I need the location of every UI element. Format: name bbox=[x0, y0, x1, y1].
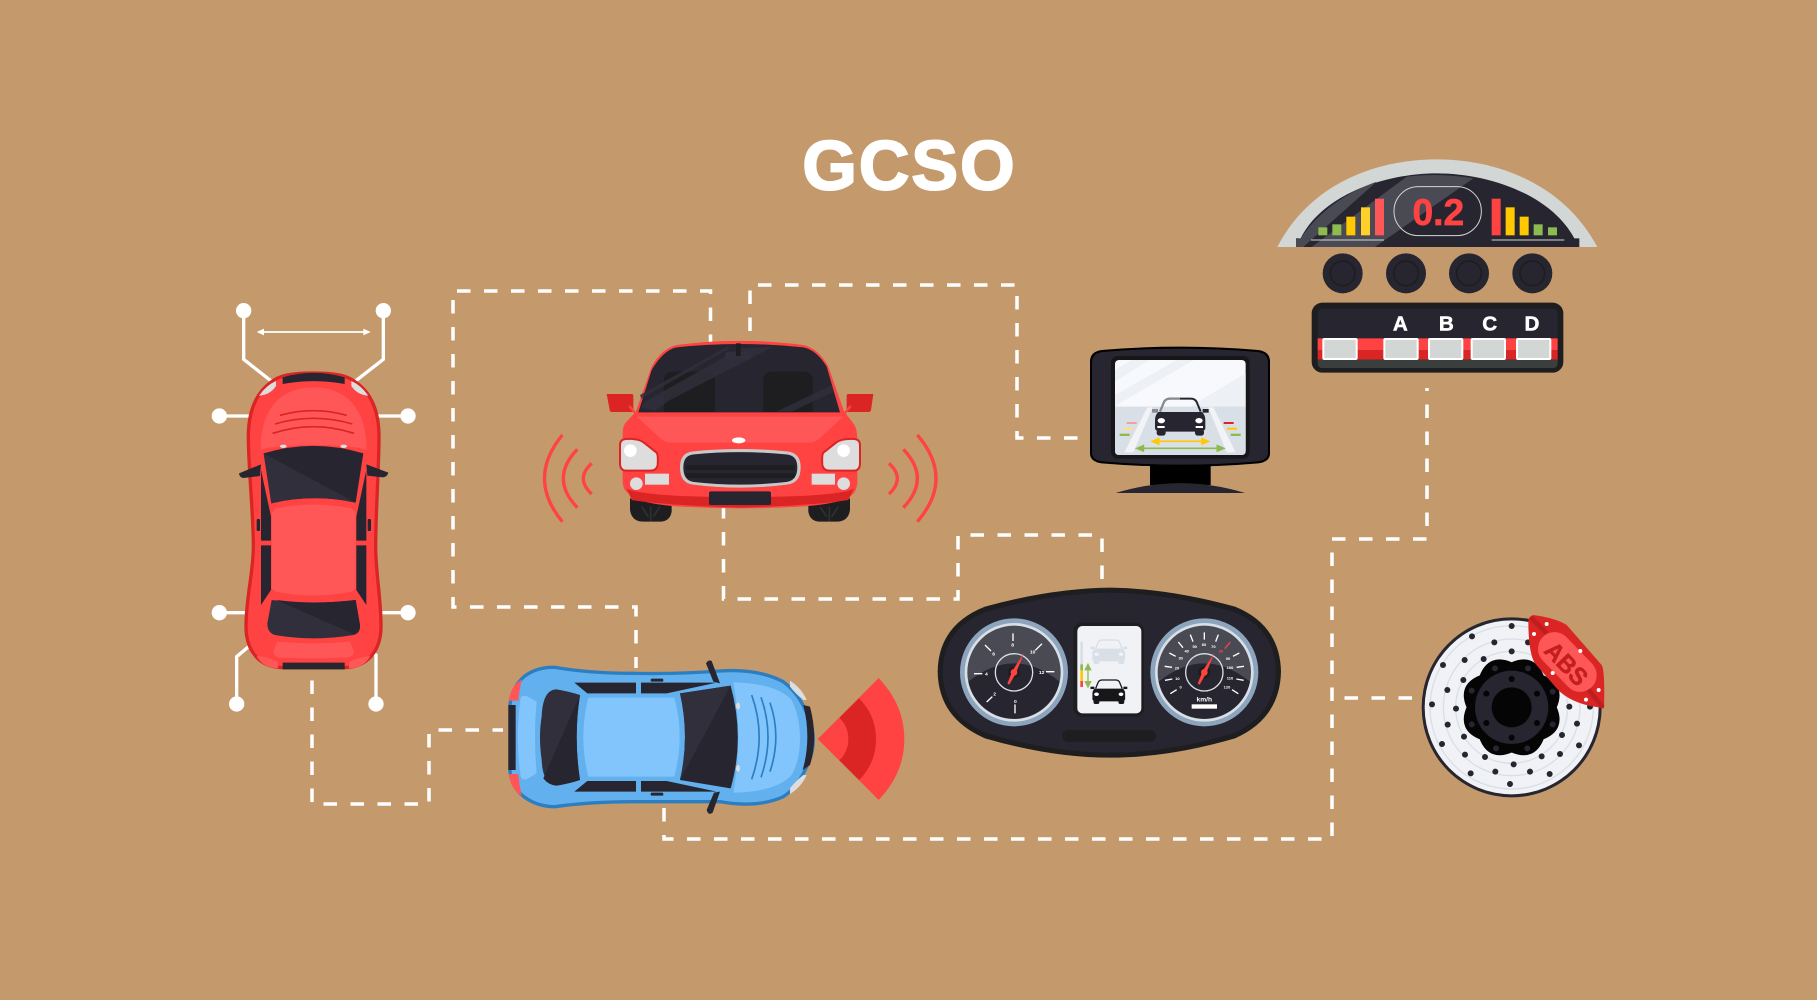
ABS brake disc bbox=[1422, 615, 1604, 797]
car body bbox=[510, 667, 813, 807]
left gauge: 8 bbox=[1011, 643, 1014, 649]
mirrors bbox=[239, 464, 388, 478]
right gauge: 90 bbox=[1226, 656, 1231, 661]
door handles bbox=[651, 679, 663, 796]
side mirrors bbox=[607, 394, 873, 414]
hood lines bbox=[752, 695, 776, 779]
right gauge: 110 bbox=[1227, 676, 1234, 681]
car ahead bbox=[1090, 640, 1127, 664]
left gauge: 4 bbox=[985, 672, 988, 678]
car body bbox=[246, 373, 381, 668]
left gauge bbox=[960, 618, 1068, 726]
windshield bbox=[680, 686, 738, 788]
front bumper bbox=[803, 705, 814, 770]
windshield bbox=[264, 446, 363, 503]
body bbox=[623, 413, 857, 508]
own car bbox=[1090, 680, 1127, 704]
rear bumper bbox=[508, 705, 516, 770]
right gauge: 50 bbox=[1192, 644, 1198, 649]
dashed connectors bbox=[312, 285, 1427, 839]
tail lights bbox=[509, 679, 522, 796]
center display bbox=[1073, 623, 1144, 717]
glass reflections bbox=[1296, 175, 1473, 247]
right level bars bbox=[1492, 199, 1564, 240]
indicator panel: C bbox=[1482, 312, 1497, 335]
headlights bbox=[620, 439, 860, 471]
arc housing bbox=[1277, 159, 1597, 247]
reading pill bbox=[1394, 187, 1481, 236]
roof bbox=[272, 504, 356, 595]
fog lights bbox=[630, 474, 850, 490]
hood bbox=[261, 387, 367, 450]
number plate bbox=[709, 491, 771, 505]
indicator panel: A bbox=[1393, 312, 1408, 335]
mirrors bbox=[706, 661, 720, 814]
right gauge: 0 bbox=[1180, 684, 1183, 689]
dark display bbox=[1296, 173, 1579, 247]
rear view monitor bbox=[1090, 347, 1270, 493]
indicator panel bbox=[1312, 303, 1563, 373]
green double arrow bbox=[1085, 664, 1091, 687]
left gauge: 12 bbox=[1039, 670, 1045, 676]
caliper: ABS bbox=[1539, 637, 1593, 692]
right gauge: 20 bbox=[1175, 665, 1180, 670]
left gauge: 0 bbox=[1014, 699, 1017, 705]
top-view red car with sensors bbox=[212, 303, 416, 712]
disc bbox=[1422, 617, 1602, 797]
tail lights bbox=[257, 656, 370, 668]
title: GCSO bbox=[802, 126, 1017, 204]
sensors bbox=[1323, 253, 1552, 293]
roof bbox=[635, 341, 845, 414]
distance markers bbox=[1120, 422, 1241, 436]
left level bars bbox=[1311, 199, 1384, 240]
windshield bbox=[638, 344, 840, 412]
wheels bbox=[630, 498, 850, 522]
right gauge: 10 bbox=[1175, 676, 1180, 681]
washers bbox=[280, 445, 347, 448]
lower bumper bbox=[627, 488, 854, 508]
door handles bbox=[257, 519, 371, 531]
roof bbox=[583, 698, 680, 777]
reflections bbox=[640, 346, 834, 412]
bottom slot bbox=[1062, 730, 1156, 742]
logo bbox=[732, 437, 745, 443]
bumpers bbox=[283, 373, 345, 669]
stand bbox=[1116, 463, 1245, 493]
right gauge: 70 bbox=[1211, 644, 1216, 649]
top-view blue car with radar wedge bbox=[508, 661, 904, 814]
indicator panel: B bbox=[1439, 312, 1454, 335]
right gauge: 40 bbox=[1184, 649, 1190, 654]
monitor frame bbox=[1090, 347, 1270, 467]
right gauge: km/h bbox=[1197, 697, 1212, 704]
right gauge: 120 bbox=[1224, 684, 1231, 689]
rearview mirror bbox=[725, 343, 752, 360]
rear window bbox=[540, 689, 580, 786]
car on screen bbox=[1152, 399, 1209, 436]
distance reading: 0.2 bbox=[1412, 192, 1464, 233]
right gauge: 30 bbox=[1178, 656, 1184, 661]
headlights bbox=[790, 681, 807, 794]
cluster housing bbox=[938, 588, 1281, 758]
left gauge: 2 bbox=[993, 691, 996, 697]
seats bbox=[664, 372, 813, 412]
hood bbox=[637, 417, 843, 443]
screen bbox=[1115, 360, 1246, 455]
front-view red car with waves bbox=[544, 341, 936, 522]
green arrow bbox=[1137, 446, 1224, 451]
side windows bbox=[574, 683, 717, 792]
hub bbox=[1465, 661, 1558, 754]
signal waves right bbox=[889, 435, 936, 522]
indicator panel: D bbox=[1525, 312, 1540, 335]
parking sensor display bbox=[1277, 159, 1597, 373]
right gauge bbox=[1150, 618, 1258, 726]
grille bbox=[680, 449, 801, 488]
signal waves left bbox=[544, 435, 592, 522]
caliper bbox=[1528, 615, 1604, 708]
hood lines bbox=[273, 411, 354, 433]
side windows bbox=[261, 470, 366, 605]
rear window bbox=[267, 600, 360, 638]
trunk bbox=[273, 642, 354, 658]
right gauge: 80 bbox=[1219, 649, 1224, 654]
width arrow bbox=[257, 329, 371, 335]
distance bar bbox=[1080, 642, 1083, 687]
headlights bbox=[259, 381, 368, 396]
yellow arrow bbox=[1152, 439, 1208, 444]
hood bbox=[733, 682, 800, 793]
instrument cluster bbox=[938, 588, 1281, 758]
left gauge: 6 bbox=[992, 652, 995, 658]
disc holes bbox=[1429, 623, 1593, 787]
washers bbox=[736, 703, 740, 772]
right gauge: 60 bbox=[1202, 642, 1207, 647]
left gauge: 10 bbox=[1030, 650, 1036, 656]
radar wedge bbox=[818, 678, 904, 800]
sensor leader lines bbox=[212, 303, 416, 712]
right gauge: 100 bbox=[1227, 665, 1234, 670]
trunk bbox=[518, 696, 537, 779]
